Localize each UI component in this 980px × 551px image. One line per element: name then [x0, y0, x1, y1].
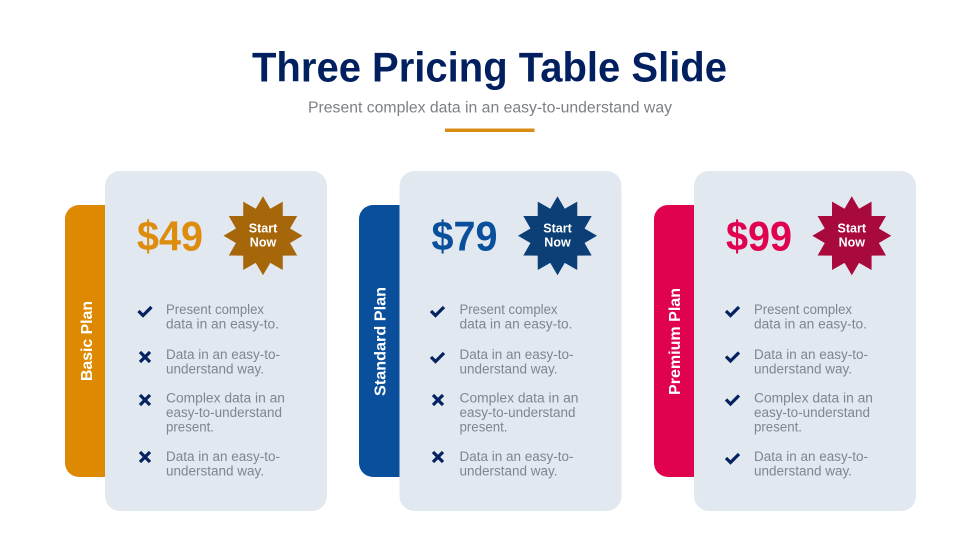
- feature 1: basic: Present complex: [166, 302, 264, 317]
- feature 1: premium: Present complex: [754, 302, 852, 317]
- plan name: basic: Basic Plan: [79, 301, 96, 381]
- badge: premium start now: Start: [838, 222, 867, 236]
- feature 2: standard: [431, 347, 574, 376]
- feature 1: basic: data in an easy-to.: [166, 316, 279, 332]
- panel: standard plan: [359, 171, 622, 511]
- badge: premium start now: Now: [839, 236, 865, 250]
- feature 3: standard: present.: [460, 420, 508, 434]
- subtitle: Present complex data in an easy-to-understand way: [308, 100, 672, 116]
- badge: standard start now: Now: [544, 236, 571, 250]
- feature 4: basic: [140, 449, 280, 478]
- badge: basic start now: [224, 196, 302, 275]
- feature 2: basic: understand way.: [166, 361, 264, 376]
- feature 4: premium: Data in an easy-to-: [754, 449, 868, 464]
- feature 1: basic: [138, 302, 279, 332]
- feature 2: standard: understand way.: [460, 361, 558, 376]
- feature 4: basic: understand way.: [166, 464, 264, 478]
- feature 1: standard: Present complex: [460, 302, 558, 317]
- feature 3: basic: Complex data in an: [166, 390, 285, 406]
- plan tab: standard: [359, 205, 400, 477]
- card background: basic: [105, 171, 327, 511]
- badge: standard start now: Start: [543, 222, 573, 236]
- feature 1: premium: [726, 302, 867, 332]
- feature 2: premium: Data in an easy-to-: [754, 347, 868, 362]
- feature 2: premium: understand way.: [754, 361, 852, 376]
- price: standard: $79: [432, 212, 498, 260]
- price: premium: $99: [726, 212, 792, 260]
- feature 3: standard: [433, 390, 578, 434]
- badge: basic start now: Now: [250, 236, 276, 250]
- feature 1: standard: [431, 302, 572, 332]
- panel: premium plan: [654, 171, 916, 511]
- panel: basic plan: [65, 171, 327, 511]
- feature 4: standard: Data in an easy-to-: [460, 449, 574, 464]
- title underline: [445, 128, 534, 132]
- price: basic: $49: [137, 212, 203, 260]
- feature 4: premium: understand way.: [754, 464, 852, 478]
- feature 4: standard: understand way.: [460, 464, 558, 478]
- card background: premium: [694, 171, 916, 511]
- feature 1: premium: data in an easy-to.: [754, 316, 867, 332]
- feature 3: basic: easy-to-understand: [166, 405, 282, 420]
- plan name: standard: Standard Plan: [372, 287, 390, 396]
- plan tab: premium: [654, 205, 694, 477]
- title: Three Pricing Table Slide: [252, 44, 727, 90]
- feature 3: premium: [726, 390, 873, 434]
- feature 3: premium: present.: [754, 420, 802, 434]
- feature 2: basic: [140, 347, 280, 376]
- feature 2: basic: Data in an easy-to-: [166, 347, 280, 362]
- feature 4: standard: [433, 449, 574, 478]
- feature 3: basic: [140, 390, 285, 434]
- feature 2: premium: [726, 347, 868, 376]
- feature 3: premium: easy-to-understand: [754, 405, 870, 420]
- card background: standard: [400, 171, 622, 511]
- plan name: premium: Premium Plan: [667, 288, 684, 395]
- badge: basic start now: Start: [249, 222, 278, 236]
- feature 3: standard: easy-to-understand: [460, 405, 576, 420]
- feature 4: premium: [726, 449, 868, 478]
- feature 2: standard: Data in an easy-to-: [460, 347, 574, 362]
- badge: premium start now: [812, 196, 891, 275]
- feature 1: standard: data in an easy-to.: [460, 316, 572, 332]
- feature 4: basic: Data in an easy-to-: [166, 449, 280, 464]
- badge: standard start now: [518, 196, 597, 275]
- feature 3: basic: present.: [166, 420, 214, 434]
- feature 3: standard: Complex data in an: [460, 390, 578, 406]
- feature 3: premium: Complex data in an: [754, 390, 873, 406]
- plan tab: basic: [65, 205, 105, 477]
